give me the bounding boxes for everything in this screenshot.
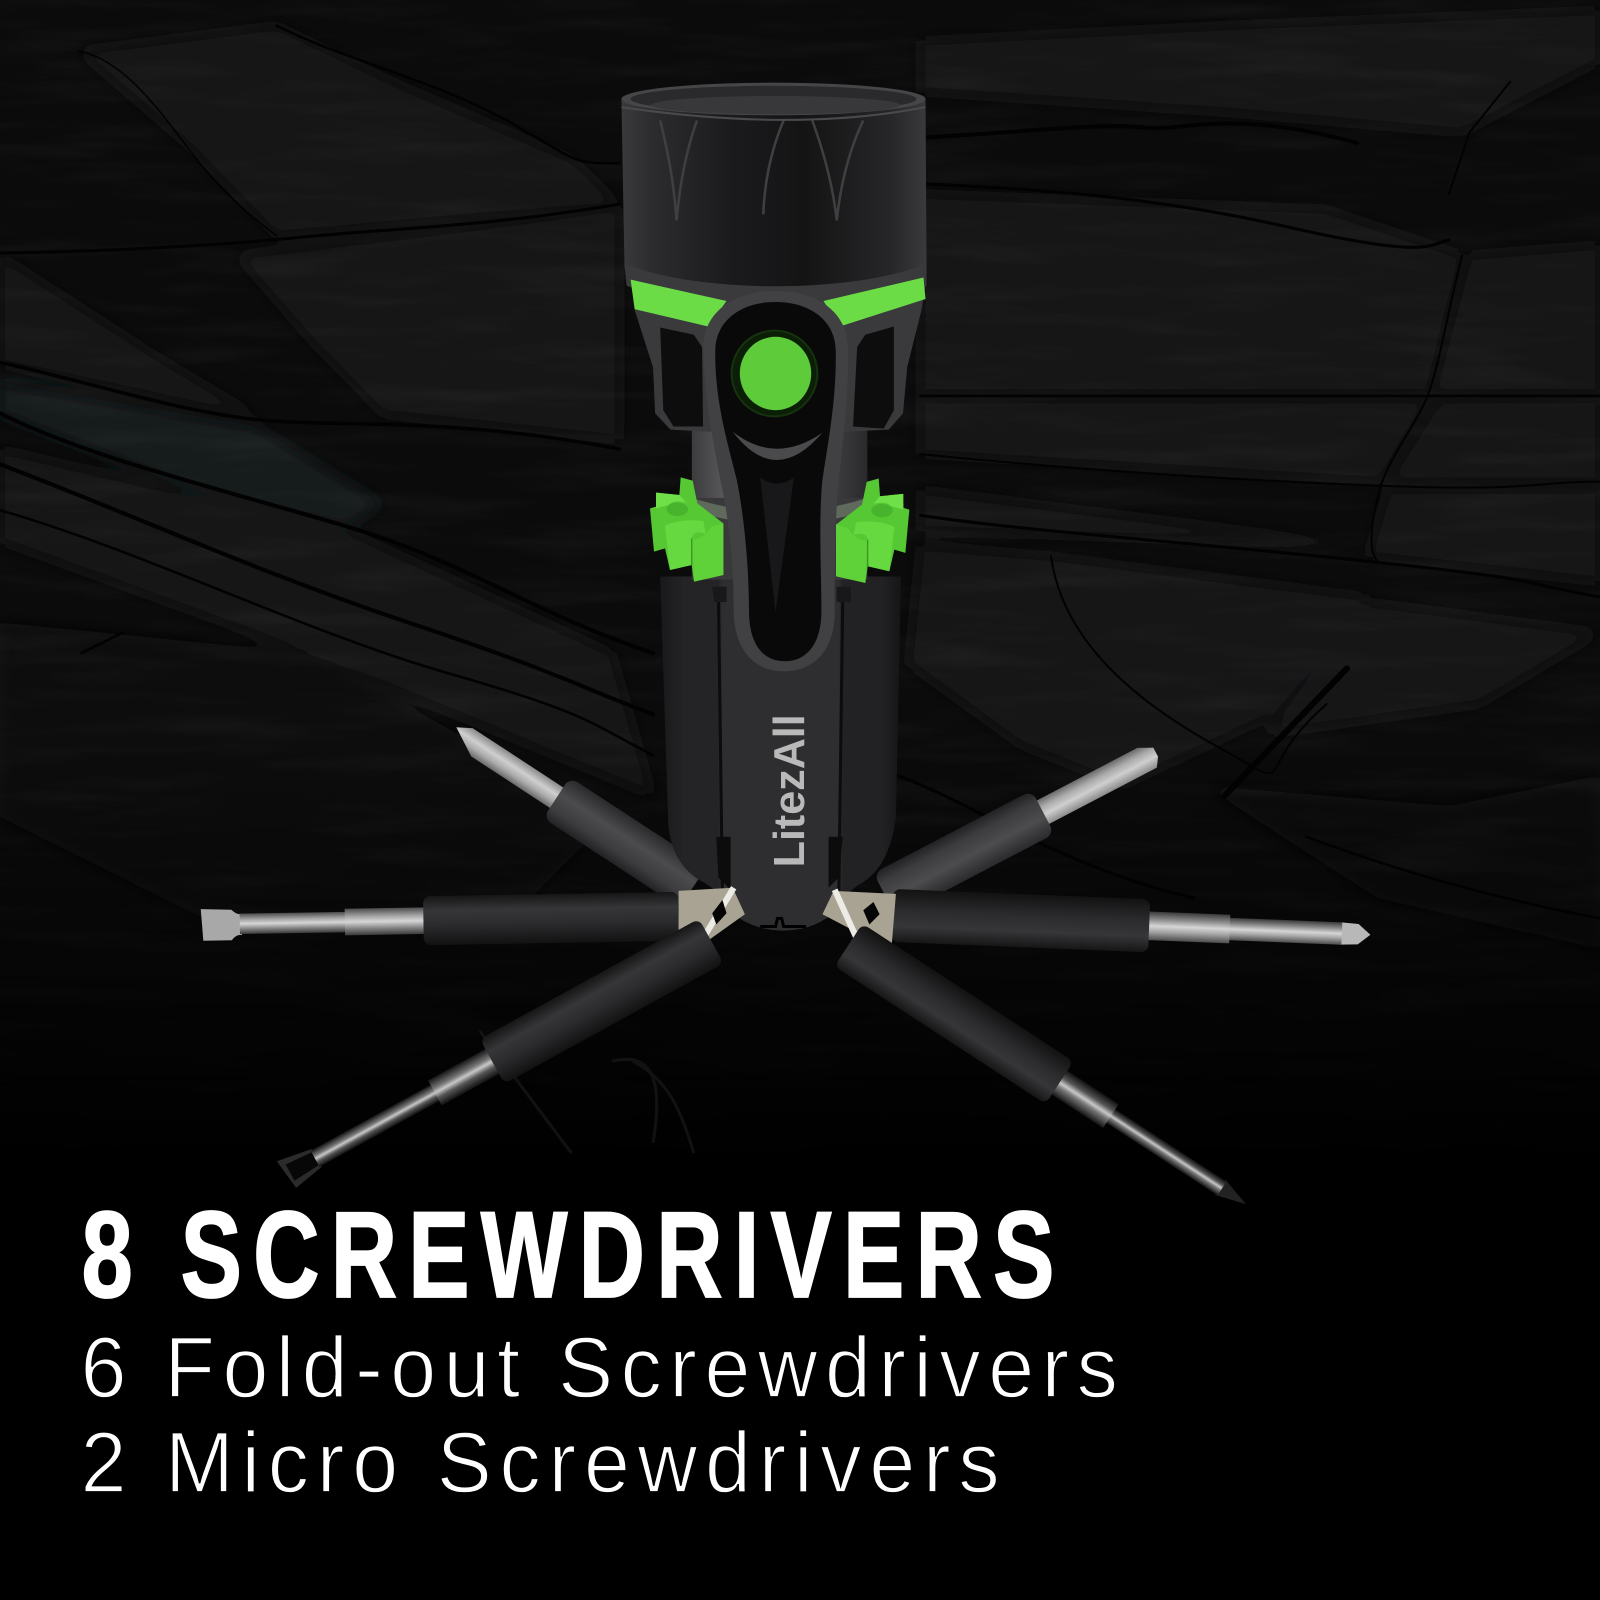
handle with bit holders [660,577,901,931]
flashlight head [621,83,927,304]
screwdriver: left [201,892,679,949]
gear: right green bit wheel [836,479,909,583]
screwdriver: upper left [441,710,707,908]
logo: LitezAll: LitezAll [765,714,814,867]
neck tube [692,423,867,580]
screwdriver: upper right [873,731,1167,917]
flashlight body [621,83,927,931]
hub: right metal fork [822,890,896,944]
heading: 8 SCREWDRIVERS: 8 SCREWDRIVERS [82,1186,1054,1323]
rock cracks [0,26,1600,918]
green band: left [631,280,727,327]
screwdriver: lower right [834,924,1260,1225]
gear: left green bit wheel [650,477,723,582]
screwdriver: right [891,889,1371,961]
switch button [732,331,817,416]
text line: 6 fold-out screwdrivers: 6 Fold-out Screwdrivers [81,1318,1118,1415]
crescent ridge [733,432,822,460]
screwdriver: lower left [272,919,724,1198]
hub: left metal fork [679,888,745,940]
neck flare [631,280,927,432]
text line: 2 micro screwdrivers: 2 Micro Screwdrivers [81,1413,1000,1510]
green band: right [823,278,926,327]
switch plate [703,291,848,671]
